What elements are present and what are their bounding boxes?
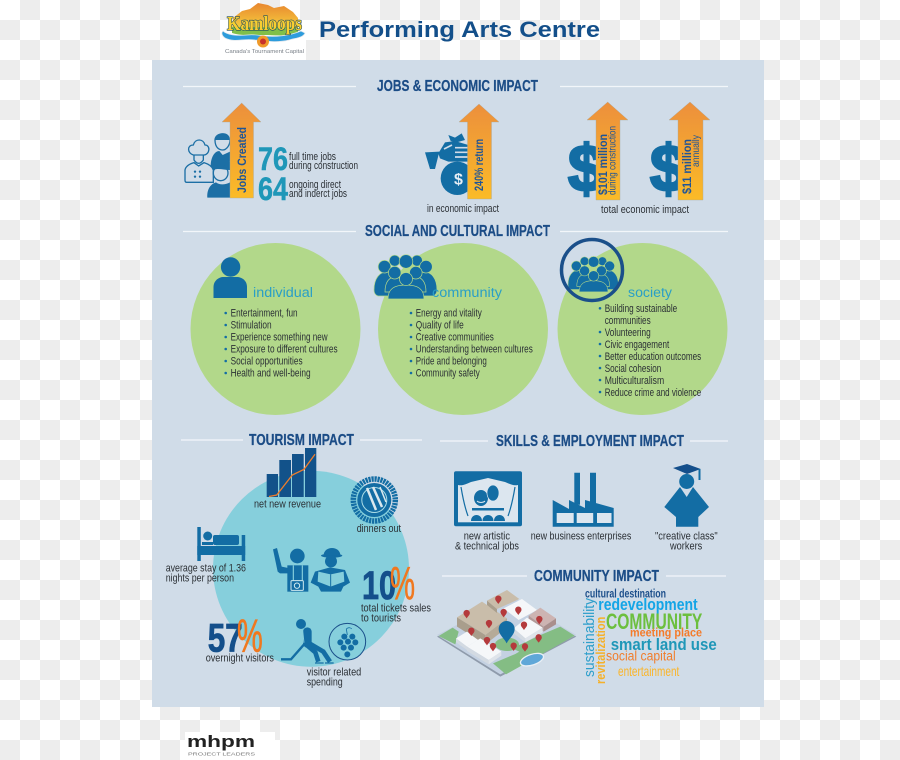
panel: individual: Entertainment, fun bbox=[231, 308, 298, 320]
icon: grapes bbox=[329, 623, 366, 660]
title: Performing Arts Centre bbox=[319, 17, 600, 42]
icon: bed with stay label: average stay of 1.36 bbox=[166, 563, 246, 575]
stat: 64 ongoing jobs: 64 bbox=[258, 171, 288, 207]
icon: ringed crowd bbox=[562, 240, 622, 300]
word cloud: smart land use bbox=[611, 635, 717, 654]
icon: hockey player bbox=[281, 619, 334, 663]
stat: 64 ongoing jobs: ongoing direct bbox=[289, 179, 341, 191]
panel: individual bbox=[190, 243, 360, 415]
arrow: 240% return bbox=[459, 104, 499, 199]
logo: Kamloops bbox=[222, 3, 305, 55]
panel: society: society bbox=[628, 285, 672, 300]
panel: community: Pride and belonging bbox=[416, 356, 487, 368]
heading: jobs and economic impact: JOBS & ECONOMIC IMPACT bbox=[377, 78, 538, 95]
logo: mhpm bbox=[187, 732, 255, 756]
stat: 10%: 10 bbox=[362, 564, 396, 608]
icon: graduate: "creative class" bbox=[655, 531, 718, 543]
icon: factory bbox=[531, 473, 632, 543]
icon: factory: new business enterprises bbox=[531, 531, 632, 543]
icon: money bag bbox=[425, 133, 474, 195]
heading: social and cultural impact: SOCIAL AND CULTURAL IMPACT bbox=[365, 223, 550, 240]
panel: tourism circle bbox=[213, 471, 409, 667]
arrow: 11 million bbox=[669, 102, 710, 200]
panel: community bbox=[374, 243, 548, 415]
icon: dollar sign one: $ bbox=[568, 131, 605, 205]
arrow: 11 million: $11 million bbox=[680, 139, 694, 194]
arrow: jobs created bbox=[222, 103, 261, 198]
panel: community: Creative communities bbox=[416, 332, 494, 344]
word cloud: revitalization bbox=[593, 617, 608, 684]
icon: money bag: $ bbox=[454, 171, 463, 188]
panel: individual: Exposure to different cultures bbox=[231, 344, 338, 356]
icon: person bbox=[214, 257, 247, 298]
stat: 57%: overnight visitors bbox=[206, 652, 274, 664]
label: total economic impact: total economic impact bbox=[601, 204, 689, 216]
icon: graduate bbox=[655, 464, 718, 552]
stat: 10% bbox=[361, 557, 431, 625]
label: visitor related spending bbox=[307, 666, 361, 688]
stat: 57% bbox=[206, 610, 274, 664]
panel: community: Quality of life bbox=[416, 320, 464, 332]
panel: community: Energy and vitality bbox=[416, 308, 482, 320]
label: visitor related spending: visitor related bbox=[307, 666, 361, 678]
icon: workers bbox=[185, 133, 230, 198]
panel: society: communities bbox=[605, 315, 651, 327]
icon: theatre: & technical jobs bbox=[455, 540, 519, 552]
arrow: 101 million: during construction bbox=[608, 126, 618, 195]
word cloud: entertainment bbox=[618, 663, 679, 679]
icon: crowd bbox=[374, 255, 437, 299]
panel: community: Community safety bbox=[416, 368, 480, 380]
panel: society: Multiculturalism bbox=[605, 375, 664, 387]
logo: Kamloops: Canada's Tournament Capital bbox=[225, 49, 304, 55]
panel: society: Civic engagement bbox=[605, 339, 669, 351]
panel: community: Understanding between cultures bbox=[416, 344, 533, 356]
word cloud bbox=[582, 589, 717, 684]
panel: society bbox=[558, 240, 728, 415]
word cloud: meeting place bbox=[630, 628, 702, 640]
stat: 57%: 57 bbox=[208, 617, 243, 661]
logo backing bbox=[220, 20, 306, 60]
icon: dollar sign two: $ bbox=[650, 131, 687, 205]
arrow: 101 million: $101 million bbox=[596, 134, 610, 195]
icon: bed with stay label bbox=[166, 527, 246, 585]
stat: 76 full time jobs: full time jobs bbox=[289, 151, 336, 163]
arrow: 240% return: 240% return bbox=[472, 139, 486, 191]
stat: 64 ongoing jobs bbox=[258, 171, 347, 207]
icon: theatre: new artistic bbox=[464, 531, 510, 543]
stat: 10%: % bbox=[390, 557, 415, 609]
word cloud: social capital bbox=[606, 649, 676, 664]
word cloud: cultural destination bbox=[585, 589, 666, 601]
logo: mhpm: PROJECT LEADERS bbox=[188, 752, 255, 756]
panel: individual: Social opportunities bbox=[231, 356, 303, 368]
stat: 76 full time jobs bbox=[258, 141, 358, 177]
label: visitor related spending: spending bbox=[307, 676, 343, 688]
icon: dinners out: dinners out bbox=[357, 523, 401, 535]
stat: 10%: to tourists bbox=[361, 613, 401, 625]
panel: individual: individual bbox=[253, 285, 313, 300]
icon: tourists bbox=[273, 548, 350, 592]
panel: individual: Stimulation bbox=[231, 320, 272, 332]
stat: 57%: % bbox=[237, 610, 263, 662]
panel: individual: Health and well-being bbox=[231, 368, 311, 380]
arrow: 11 million: annually bbox=[691, 135, 702, 167]
arrow: 101 million bbox=[587, 102, 628, 200]
panel: society: Better education outcomes bbox=[605, 351, 702, 363]
arrow: jobs created: Jobs Created bbox=[235, 127, 249, 193]
panel: society: Social cohesion bbox=[605, 363, 661, 375]
icon: bed with stay label: nights per person bbox=[166, 573, 234, 585]
heading: skills and employment impact: SKILLS & EMPLOYMENT IMPACT bbox=[496, 433, 684, 450]
stat: 76 full time jobs: during construction bbox=[289, 160, 358, 172]
chart: net new revenue bbox=[254, 448, 321, 510]
heading: community impact: COMMUNITY IMPACT bbox=[534, 568, 659, 585]
panel: individual: Experience something new bbox=[231, 332, 328, 344]
icon: dinners out bbox=[353, 479, 401, 535]
word cloud: COMMUNITY bbox=[606, 609, 703, 634]
panel: society: Volunteering bbox=[605, 327, 651, 339]
panel: society: Building sustainable bbox=[605, 303, 677, 315]
logo: Kamloops: Kamloops bbox=[227, 13, 302, 35]
map: isometric site bbox=[437, 590, 576, 677]
word cloud: sustainability bbox=[582, 597, 598, 677]
panel: society: Reduce crime and violence bbox=[605, 387, 701, 399]
heading: tourism impact: TOURISM IMPACT bbox=[249, 432, 354, 449]
logo backing: mhpm bbox=[185, 732, 275, 760]
chart: net new revenue: net new revenue bbox=[254, 498, 321, 510]
icon: graduate: workers bbox=[669, 540, 703, 552]
logo: mhpm: mhpm bbox=[187, 732, 255, 751]
label: in economic impact: in economic impact bbox=[427, 203, 499, 215]
main panel bbox=[152, 60, 764, 707]
stat: 64 ongoing jobs: and inderct jobs bbox=[289, 188, 347, 200]
word cloud: redevelopment bbox=[598, 595, 698, 614]
stat: 10%: total tickets sales bbox=[361, 603, 431, 615]
stat: 76 full time jobs: 76 bbox=[258, 141, 288, 177]
panel: community: community bbox=[432, 285, 502, 300]
icon: theatre bbox=[454, 471, 522, 552]
